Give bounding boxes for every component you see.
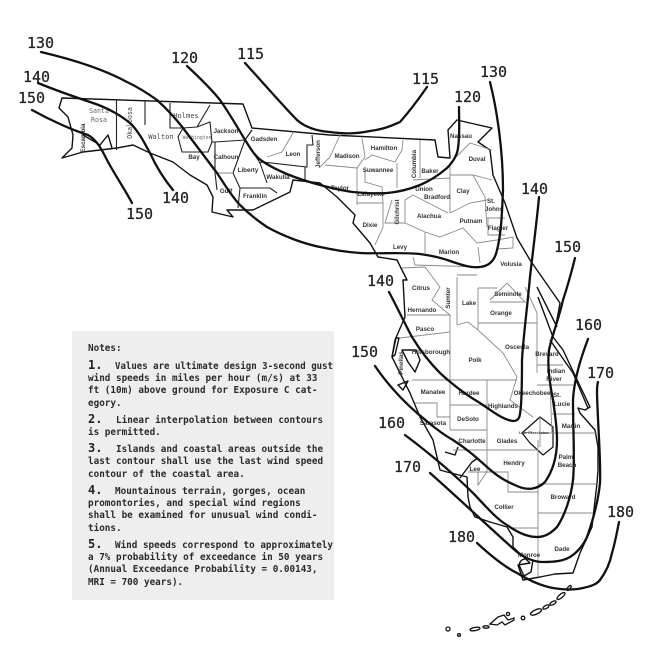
note 2: 2. [88, 412, 102, 426]
note 5: MRI = 700 years). [88, 577, 183, 588]
county names: Franklin [243, 193, 267, 200]
note 2 [88, 412, 323, 438]
state coastline [59, 98, 598, 580]
county names: Charlotte [458, 438, 486, 445]
county names: Orange [490, 310, 512, 317]
county names: Okaloosa [126, 107, 134, 139]
county names: Indian [547, 368, 565, 375]
county names: Rosa [91, 116, 107, 124]
note 3: Islands and coastal areas outside the [116, 444, 323, 455]
contour labels: 180 [448, 528, 475, 546]
contour labels: 130 [480, 63, 507, 81]
contour labels: 170 [394, 458, 421, 476]
county names: Johns [485, 206, 504, 213]
panhandle county lines [116, 99, 313, 208]
note 1: 1. [88, 358, 102, 372]
county names: Hernando [408, 307, 437, 314]
contour 140 south [389, 197, 539, 421]
contour 160 [405, 339, 588, 537]
county names: Wakulla [266, 174, 290, 181]
county names: St. [553, 392, 561, 399]
county names: Hamilton [371, 145, 397, 152]
note 4: 4. [88, 483, 102, 497]
contour labels: 115 [412, 70, 439, 88]
county names: Holmes [173, 112, 199, 120]
county names: Flagler [488, 225, 509, 232]
note 1 [88, 358, 333, 409]
notes panel [72, 331, 334, 600]
county names: Highlands [488, 403, 519, 410]
county names: Washington [183, 135, 212, 141]
county names: Okeechobee [514, 390, 551, 397]
note 1: Values are ultimate design 3-second gust [115, 361, 333, 372]
county names: Hardee [459, 390, 480, 397]
contour labels: 180 [607, 503, 634, 521]
contour 180 [477, 522, 619, 590]
county names: Clay [456, 188, 470, 195]
county names: Gadsden [251, 136, 277, 143]
county names: St. [487, 198, 495, 205]
note 4: shall be examined for unusual wind condi- [88, 510, 318, 521]
county names: Citrus [412, 285, 430, 292]
county names: Martin [562, 423, 581, 430]
county names: Hendry [503, 460, 525, 467]
note 4: tions. [88, 523, 122, 534]
county names: Jefferson [315, 140, 322, 168]
note 1: ft (10m) above ground for Exposure C cat- [88, 385, 318, 396]
county names: Escambia [80, 123, 87, 152]
contour 150 west [32, 110, 132, 203]
contour labels: 140 [367, 272, 394, 290]
county names: Volusia [500, 261, 522, 268]
note 2: Linear interpolation between contours [116, 415, 323, 426]
county names: Liberty [238, 167, 259, 174]
contour labels: 160 [575, 316, 602, 334]
county names: Walton [148, 133, 174, 141]
county names: Brevard [535, 351, 559, 358]
map: Florida outline and counties [59, 98, 598, 636]
county names: Lake [462, 300, 477, 307]
note 5: 5. [88, 537, 102, 551]
florida keys islands [446, 585, 572, 636]
county names: Dade [554, 546, 570, 553]
note 4: promontories, and special wind regions [88, 498, 301, 509]
notes background [72, 331, 334, 600]
note 5: a 7% probability of exceedance in 50 years [88, 552, 323, 563]
county names: Dixie [363, 222, 378, 229]
county names: Hillsborough [412, 349, 450, 356]
county names: Sarasota [420, 420, 447, 427]
county names: Collier [494, 504, 514, 511]
contour labels: 150 [126, 205, 153, 223]
county names: Suwannee [363, 167, 394, 174]
county names: Osceola [505, 344, 530, 351]
contour labels: 150 [18, 89, 45, 107]
county names: Alachua [417, 213, 442, 220]
contour labels: 140 [521, 180, 548, 198]
county names: Taylor [331, 185, 350, 192]
county names [80, 107, 581, 559]
contour labels: 115 [237, 45, 264, 63]
county names: Nassau [450, 133, 472, 140]
note 1: wind speeds in miles per hour (m/s) at 33 [88, 373, 318, 384]
notes heading: Notes: [88, 343, 122, 354]
county names: Duval [469, 156, 486, 163]
county names: Columbia [411, 149, 418, 178]
county names: Gilchrist [394, 199, 401, 225]
contour 120 [187, 66, 459, 193]
county names: Sumter [445, 287, 452, 309]
county names: Bradford [424, 194, 450, 201]
county names: Lee [470, 466, 481, 473]
note 2: is permitted. [88, 427, 161, 438]
note 3: contour of the coastal area. [88, 469, 245, 480]
contour labels: 150 [351, 343, 378, 361]
contour labels [18, 34, 634, 546]
county names: DeSoto [457, 416, 479, 423]
county names: Jackson [214, 128, 239, 135]
county names: Palm [559, 454, 574, 461]
note 1: egory. [88, 398, 122, 409]
note 3 [88, 441, 323, 480]
county names: River [546, 376, 562, 383]
contour 115 [245, 63, 427, 133]
county names: Beach [558, 462, 577, 469]
contour 140 west [38, 83, 173, 190]
contour labels: 120 [454, 88, 481, 106]
contour labels: 140 [162, 189, 189, 207]
county names: Polk [468, 357, 482, 364]
contour labels: 160 [378, 414, 405, 432]
county names: Calhoun [214, 154, 239, 161]
county names: Madison [334, 153, 360, 160]
note 4 [88, 483, 318, 534]
county names: Broward [550, 494, 576, 501]
county names: Lucie [554, 401, 571, 408]
contour 130 [41, 52, 503, 267]
county names: Monroe [518, 552, 541, 559]
county names: Pasco [416, 326, 434, 333]
county names: Leon [286, 151, 301, 158]
contour labels: 140 [23, 68, 50, 86]
county names: Bay [188, 154, 200, 161]
county names: Putnam [460, 218, 483, 225]
county names: Lafayette [357, 191, 385, 198]
county names: Gulf [220, 188, 233, 195]
note 3: 3. [88, 441, 102, 455]
contour labels: 150 [554, 238, 581, 256]
county names: Lake Okeechobee [519, 431, 549, 435]
county names: Union [415, 186, 433, 193]
county names: Pinellas [398, 351, 405, 375]
county names: Marion [439, 249, 459, 256]
county names: Seminole [494, 291, 522, 298]
contour 150 south [375, 258, 575, 489]
county names: Glades [497, 438, 518, 445]
county names: Baker [421, 168, 439, 175]
note 4: Mountainous terrain, gorges, ocean [115, 486, 305, 497]
wind speed contours [32, 52, 619, 590]
contour 170 [430, 382, 600, 562]
county names: Santa [89, 107, 109, 115]
note 3: last contour shall use the last wind speed [88, 456, 323, 467]
note 5: Wind speeds correspond to approximately [115, 540, 333, 551]
county names: Levy [393, 244, 408, 251]
contour labels: 130 [27, 34, 54, 52]
contour labels: 120 [171, 49, 198, 67]
contour labels: 170 [587, 364, 614, 382]
note 5 [88, 537, 333, 588]
note 5: (Annual Exceedance Probability = 0.00143, [88, 564, 318, 575]
county lines [215, 133, 597, 577]
county names: Manatee [421, 389, 446, 396]
